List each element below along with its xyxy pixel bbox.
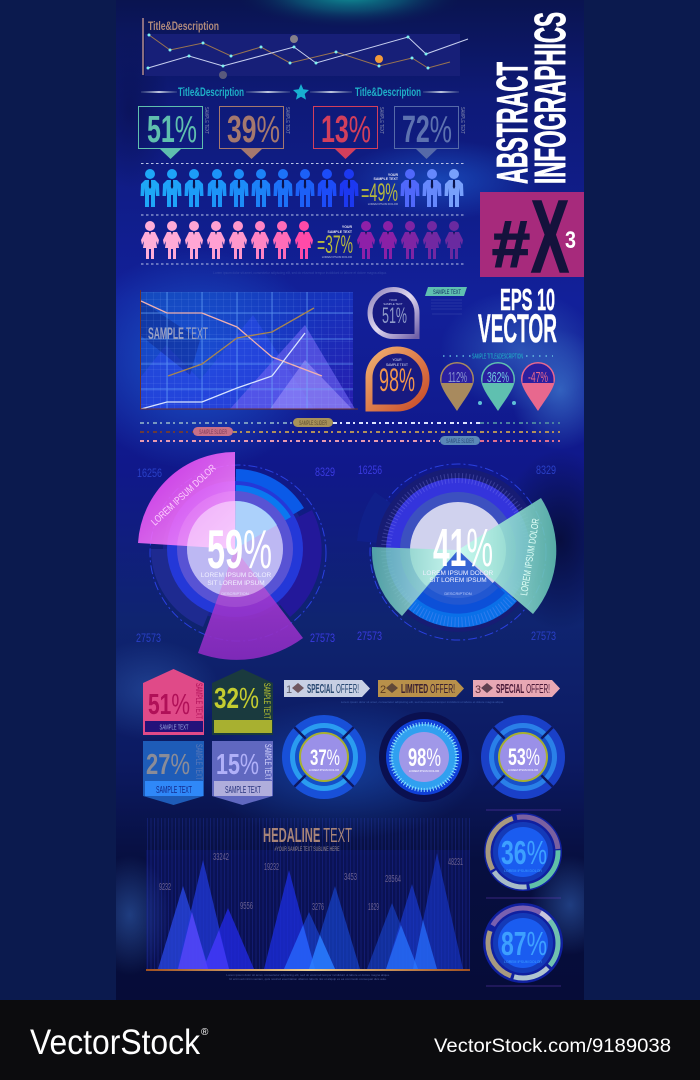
badge: 32% green bbox=[212, 669, 273, 735]
offer ribbon 1: 1 bbox=[286, 684, 292, 696]
donut chart: 59% bbox=[136, 452, 335, 660]
women pictogram row bbox=[141, 221, 463, 259]
badge: 32% green: SAMPLE TEXT bbox=[262, 683, 272, 719]
donut chart: 59%: 16256 bbox=[137, 466, 162, 480]
donut chart: 41%: 27573 bbox=[357, 629, 382, 643]
offer ribbon 2: 2 bbox=[380, 684, 386, 696]
offer ribbon 2 bbox=[378, 680, 464, 697]
stat: 37%: LOREM IPSUM DOLOR bbox=[322, 255, 352, 259]
donut chart: 41%: 27573 bbox=[531, 629, 556, 643]
box 13% bbox=[314, 106, 384, 159]
box 39%: 39% bbox=[227, 109, 280, 151]
offer ribbon 2: LIMITED OFFER! bbox=[401, 681, 455, 696]
section heading row with star bbox=[141, 84, 459, 100]
badge: 27% blue: 27% bbox=[146, 749, 190, 781]
box 51%: SAMPLE TEXT bbox=[203, 107, 209, 134]
tag: sample text: SAMPLE TEXT bbox=[433, 289, 461, 296]
badge: 15% lilac: SAMPLE TEXT bbox=[263, 744, 273, 780]
badge: 32% green: 32% bbox=[214, 683, 259, 715]
tag: sample text bbox=[425, 287, 467, 314]
stat: 49%: =49% bbox=[361, 179, 398, 207]
gauge: 37% bbox=[282, 715, 366, 799]
slider pill: tan bbox=[293, 418, 333, 427]
slider pill: blue: SAMPLE SLIDER bbox=[446, 438, 474, 445]
offer ribbon 1 bbox=[284, 680, 370, 697]
stat: 49%: SAMPLE TEXT bbox=[373, 177, 399, 181]
ring gauge: 87%: LOREM IPSUM DOLOR bbox=[504, 960, 542, 964]
donut value: 59% bbox=[207, 518, 272, 580]
pin: 98% bbox=[369, 350, 426, 408]
slider lines bbox=[140, 418, 560, 445]
box 72%: 72% bbox=[402, 109, 452, 151]
triangle chart: 3276 bbox=[312, 902, 324, 913]
badge: 51% pink bbox=[143, 669, 204, 735]
pin: 98%: 98% bbox=[379, 362, 415, 398]
pin: 98%: YOUR bbox=[392, 358, 402, 362]
triangle chart: 48231 bbox=[448, 857, 463, 868]
footer url: VectorStock.com/9189038 bbox=[434, 1036, 671, 1057]
eps 10 vector label: EPS 10 bbox=[500, 282, 555, 317]
gauge: 98% bbox=[379, 712, 469, 802]
badge: 15% lilac: SAMPLE TEXT bbox=[225, 785, 261, 796]
footer brand: VectorStock bbox=[30, 1023, 200, 1062]
pin 112%: 112% bbox=[448, 369, 467, 386]
donut chart: 59%: SIT LOREM IPSUM bbox=[207, 580, 265, 587]
donut chart: 59%: 8329 bbox=[315, 465, 335, 479]
box 13%: 13% bbox=[321, 109, 371, 151]
eps 10 vector label bbox=[478, 282, 557, 351]
text: Lorem ipsum dolor sit amet, consectetur adipiscing elit, sed do eiusmod tempor incididunt ut labore et dolore magna aliqua bbox=[341, 700, 504, 704]
triangle chart: #YOUR SAMPLE TEXT SUBLINE HERE bbox=[274, 847, 340, 853]
donut chart: 41%: SIT LOREM IPSUM bbox=[429, 577, 487, 584]
badge: 51% pink: 51% bbox=[148, 689, 190, 721]
line chart: top bbox=[142, 18, 468, 79]
stat: 49%: LOREM IPSUM DOLOR bbox=[368, 202, 398, 206]
ring gauge: 87% bbox=[483, 903, 563, 983]
donut chart: 41%: LOREM IPSUM DOLOR bbox=[423, 570, 494, 577]
badge: 15% lilac bbox=[212, 741, 273, 805]
men pictogram row bbox=[140, 169, 464, 207]
pin: 51%: YOUR bbox=[389, 298, 397, 302]
slider pill: tan: SAMPLE SLIDER bbox=[299, 420, 327, 427]
ring gauge: 87%: 87% bbox=[501, 925, 547, 962]
donut chart: 41%: 8329 bbox=[536, 463, 556, 477]
footer band bbox=[0, 1000, 700, 1080]
chart headline: HEDALINE TEXT bbox=[263, 825, 352, 847]
stat: 37%: =37% bbox=[317, 231, 353, 259]
offer ribbon 3: 3 bbox=[475, 684, 481, 696]
pin 362%: 362% bbox=[487, 369, 509, 386]
triangle chart bbox=[146, 818, 470, 981]
badge: 27% blue: SAMPLE TEXT bbox=[194, 744, 204, 780]
triangle chart: 9232 bbox=[159, 882, 171, 893]
donut chart: 41%: DESCRIPTION bbox=[444, 591, 472, 596]
triangle chart: Ut enim ad minim veniam, quis nostrud exercitation ullamco laboris nisi ut aliquip ex ea commodo consequat duis aute. bbox=[229, 977, 387, 981]
hashtag badge bbox=[480, 179, 584, 294]
gauge: 98%: 98% bbox=[408, 744, 441, 772]
box 13%: SAMPLE TEXT bbox=[378, 107, 384, 134]
pin: 51%: SAMPLE TEXT bbox=[383, 302, 403, 306]
badge: 27% blue: SAMPLE TEXT bbox=[156, 785, 192, 796]
stat boxes bbox=[138, 106, 465, 159]
stat: 49% bbox=[361, 173, 399, 207]
box 51%: 51% bbox=[147, 109, 197, 151]
donut chart: 59%: LOREM IPSUM DOLOR bbox=[201, 572, 272, 579]
gauge: 53%: LOREM IPSUM DOLOR bbox=[508, 768, 538, 772]
box 51% bbox=[138, 106, 209, 159]
ring gauge: 36%: 36% bbox=[501, 834, 547, 871]
badge: 51% pink: SAMPLE TEXT bbox=[194, 683, 204, 719]
pin: 51% bbox=[370, 290, 417, 336]
stat: 37%: SAMPLE TEXT bbox=[327, 230, 353, 234]
text: VECTOR bbox=[478, 307, 557, 351]
pin: 51%: 51% bbox=[382, 303, 407, 328]
badge: 27% blue bbox=[143, 741, 204, 805]
gauge: 37%: LOREM IPSUM DOLOR bbox=[309, 768, 339, 772]
magenta sector label: LOREM IPSUM DOLOR bbox=[150, 463, 218, 528]
triangle chart: 28564 bbox=[385, 874, 401, 885]
donut chart: 59%: DESCRIPTION bbox=[221, 591, 249, 596]
footer band: ® bbox=[201, 1027, 209, 1038]
donut value: 41% bbox=[433, 518, 493, 578]
central panel background bbox=[116, 0, 584, 1000]
section heading row with star: Title&Description bbox=[355, 85, 421, 99]
slider pill: blue bbox=[440, 436, 480, 445]
slider pill: pink: SAMPLE SLIDER bbox=[199, 429, 227, 436]
gauge: 98%: LOREM IPSUM DOLOR bbox=[409, 769, 439, 773]
badge: 15% lilac: 15% bbox=[216, 749, 259, 781]
box 72% bbox=[394, 106, 465, 159]
map pins group: SAMPLE TITLE&DESCRIPTION bbox=[472, 354, 523, 360]
pin: 98%: SAMPLE TEXT bbox=[386, 363, 408, 367]
pin -47%: -47% bbox=[528, 369, 548, 386]
donut chart: 59%: 27573 bbox=[136, 631, 161, 645]
teal sector label: LOREM IPSUM DOLOR bbox=[519, 518, 542, 596]
hashtag badge: X bbox=[531, 179, 569, 294]
hashtag badge: # bbox=[492, 207, 530, 281]
triangle chart: Lorem ipsum dolor sit amet, consectetur adipiscing elit, sed do eiusmod tempor incididunt ut labore et dolore magna aliqua. bbox=[226, 973, 390, 977]
box 39%: SAMPLE TEXT bbox=[284, 107, 290, 134]
triangle chart: 9556 bbox=[240, 901, 253, 912]
triangle chart: 19232 bbox=[264, 862, 279, 873]
offer ribbon 3 bbox=[473, 680, 560, 697]
gauge: 53% bbox=[481, 715, 565, 799]
chart label: SAMPLE TEXT bbox=[148, 324, 208, 343]
section heading row with star: Title&Description bbox=[178, 85, 244, 99]
stat: 49%: YOUR bbox=[388, 173, 398, 177]
chart title: Title&Description bbox=[148, 19, 219, 33]
gauge: 37%: 37% bbox=[310, 745, 340, 770]
stat: 37% bbox=[317, 225, 353, 259]
badge: 51% pink: SAMPLE TEXT bbox=[160, 722, 189, 732]
grid chart bbox=[140, 290, 358, 409]
slider pill: pink bbox=[193, 427, 233, 436]
donut chart: 41% bbox=[357, 463, 556, 643]
offer ribbon 3: SPECIAL OFFER! bbox=[496, 681, 550, 696]
ring gauge: 36% bbox=[484, 813, 562, 891]
donut chart: 59%: 27573 bbox=[310, 631, 335, 645]
hashtag badge: 3 bbox=[565, 227, 576, 254]
map pins group bbox=[440, 354, 555, 411]
title: abstract infographics bbox=[488, 12, 575, 184]
triangle chart: 3453 bbox=[344, 872, 357, 883]
box 72%: SAMPLE TEXT bbox=[459, 107, 465, 134]
ring gauge: 36%: LOREM IPSUM DOLOR bbox=[504, 869, 542, 873]
triangle chart: 33242 bbox=[213, 852, 229, 863]
stat: 37%: YOUR bbox=[342, 225, 352, 229]
gauge: 53%: 53% bbox=[508, 744, 540, 771]
donut chart: 41%: 16256 bbox=[358, 463, 382, 477]
faint caption: Lorem ipsum dolor sit amet, consectetur adipiscing elit, sed do eiusmod tempor incididunt ut labore et dolore magna aliqua. bbox=[213, 271, 387, 275]
offer ribbon 1: SPECIAL OFFER! bbox=[307, 681, 359, 696]
triangle chart: 1829 bbox=[368, 902, 379, 913]
